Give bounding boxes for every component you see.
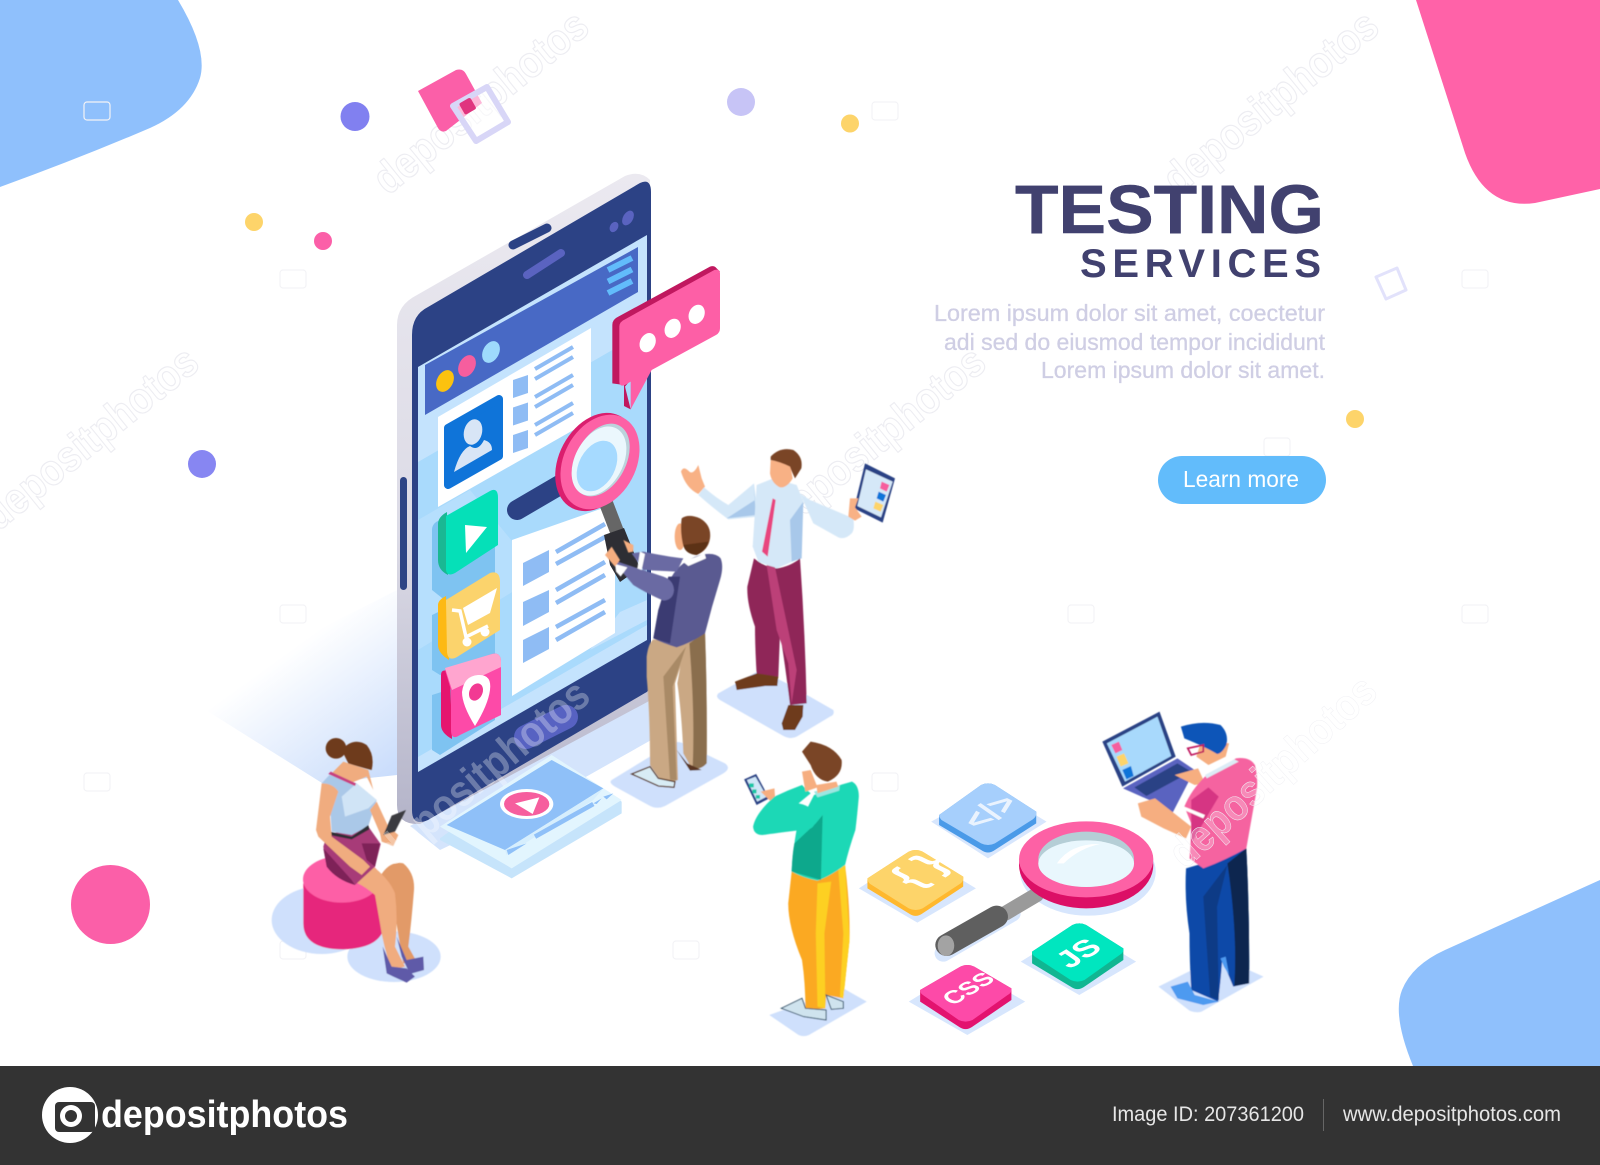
platform bbox=[611, 742, 728, 808]
arms bbox=[316, 783, 370, 875]
background blob: top right bbox=[1416, 0, 1600, 204]
location tile bbox=[441, 654, 501, 739]
handle bbox=[943, 913, 1012, 953]
document card bbox=[512, 507, 615, 696]
description: Lorem ipsum dolor sit amet, coectetur bbox=[934, 300, 1325, 326]
ring bbox=[1019, 822, 1153, 908]
search bar bbox=[517, 479, 570, 510]
play button bbox=[500, 789, 553, 819]
person: teal sweater bbox=[744, 742, 867, 1036]
phone bbox=[744, 774, 769, 805]
image id: Image ID: 207361200 bbox=[1112, 1103, 1304, 1126]
floor gradient shadow bbox=[185, 590, 397, 783]
tile: CSS bbox=[909, 965, 1025, 1035]
person: woman on stool bbox=[272, 738, 441, 983]
person: pink shirt with laptop bbox=[1102, 712, 1264, 1012]
speech bubble bbox=[612, 266, 720, 409]
title: SERVICES bbox=[1080, 242, 1321, 286]
speaker bbox=[513, 228, 547, 245]
magnifying glass on phone bbox=[539, 399, 655, 582]
floating squares icon bbox=[418, 70, 508, 141]
logo wordmark: depositphotos bbox=[101, 1094, 348, 1136]
tile: html code bbox=[931, 783, 1047, 858]
hands bbox=[605, 547, 620, 567]
watermark overlay: depositphotos bbox=[760, 337, 995, 540]
description: Lorem ipsum dolor sit amet. bbox=[1041, 357, 1325, 383]
raised hand bbox=[681, 465, 705, 494]
play tile bbox=[438, 490, 498, 575]
sweater bbox=[653, 554, 722, 647]
near leg bbox=[647, 639, 687, 784]
platform bbox=[717, 670, 834, 738]
phone floor shadow bbox=[410, 690, 660, 850]
learn more button: Learn more bbox=[1183, 466, 1299, 492]
neck and face bbox=[332, 762, 373, 790]
pants bbox=[747, 558, 807, 705]
top bbox=[322, 775, 377, 835]
large magnifying glass bbox=[938, 821, 1156, 956]
cart tile bbox=[438, 572, 500, 660]
platforms bbox=[272, 886, 372, 954]
footer bar bbox=[0, 1066, 1600, 1165]
home button bbox=[526, 717, 566, 737]
hair bbox=[326, 738, 346, 759]
tablet bbox=[854, 463, 895, 523]
title bbox=[1015, 171, 1324, 286]
head bbox=[675, 523, 685, 550]
CSS glyph: CSS bbox=[937, 969, 1001, 1009]
legs bbox=[788, 865, 850, 1010]
description bbox=[934, 300, 1326, 383]
background blob: bottom right bbox=[1399, 880, 1600, 1066]
profile card bbox=[438, 328, 591, 507]
screen frame bbox=[412, 182, 651, 822]
app tile shadows bbox=[432, 500, 495, 755]
phone bezel bbox=[397, 174, 651, 824]
skirt bbox=[323, 827, 381, 885]
watermark over phone: depositphotos bbox=[367, 670, 599, 876]
app header bar bbox=[425, 247, 638, 415]
shirt bbox=[753, 478, 803, 568]
tile: braces bbox=[859, 848, 976, 923]
laptop bbox=[1102, 712, 1176, 787]
shoes bbox=[632, 767, 675, 787]
sweater bbox=[792, 782, 859, 881]
watermark overlay bbox=[0, 1, 1488, 959]
platform bbox=[1158, 957, 1264, 1012]
screen display bbox=[418, 235, 647, 772]
arm bbox=[1138, 798, 1191, 838]
JS glyph: JS bbox=[1048, 933, 1109, 973]
description: adi sed do eiusmod tempor incididunt bbox=[944, 329, 1326, 355]
braces glyph: { } bbox=[878, 848, 958, 892]
legs bbox=[377, 863, 417, 963]
decorative dots bbox=[71, 88, 1364, 944]
learn more button bbox=[1158, 456, 1326, 504]
code glyph: </> bbox=[951, 789, 1030, 834]
phone bbox=[383, 810, 406, 835]
shoes bbox=[1171, 982, 1219, 1005]
logo icon bbox=[42, 1087, 98, 1143]
title: TESTING bbox=[1015, 171, 1324, 248]
video player card bbox=[440, 755, 622, 878]
watermark over person: depositphotos bbox=[1159, 666, 1386, 877]
far leg bbox=[677, 632, 707, 769]
stool bbox=[303, 880, 385, 949]
shoes bbox=[735, 673, 778, 690]
shoes bbox=[397, 937, 424, 974]
person: man with magnifier bbox=[605, 516, 728, 808]
side button bbox=[400, 477, 407, 590]
floating outline square bbox=[1376, 268, 1406, 299]
tie bbox=[762, 498, 776, 557]
hand bbox=[761, 788, 775, 802]
person: man with tablet bbox=[681, 449, 895, 738]
website: www.depositphotos.com bbox=[1342, 1103, 1561, 1126]
tile: JS bbox=[1021, 923, 1136, 995]
shirt bbox=[1184, 758, 1257, 868]
background blob: top left bbox=[0, 0, 202, 187]
phone bbox=[397, 174, 651, 824]
platform bbox=[769, 988, 867, 1036]
head bbox=[1196, 740, 1229, 765]
legs bbox=[1186, 848, 1249, 1002]
arms bbox=[698, 483, 758, 519]
head bbox=[770, 460, 793, 487]
head bbox=[802, 770, 817, 792]
shoes bbox=[781, 998, 826, 1020]
